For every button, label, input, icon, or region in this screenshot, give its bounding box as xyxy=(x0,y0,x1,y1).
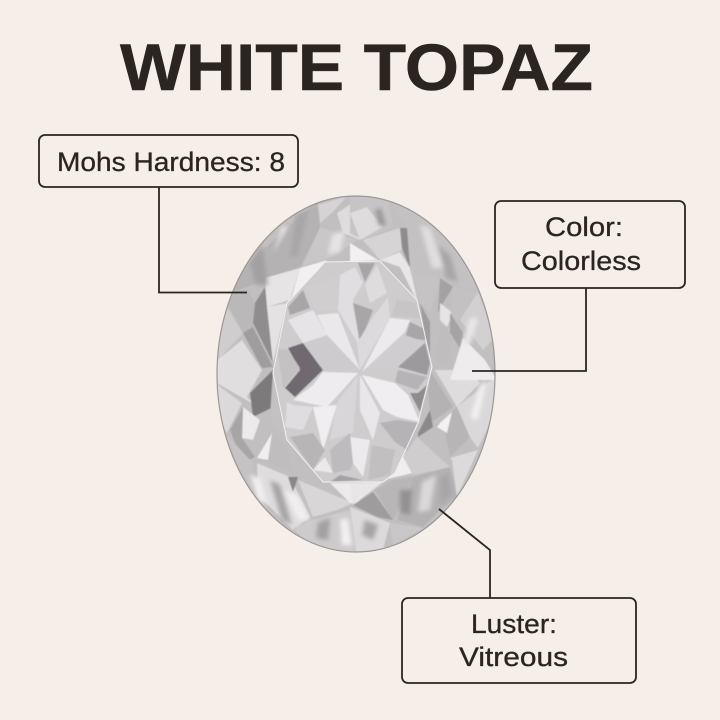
callout: luster xyxy=(402,598,636,683)
callout: color: Color: xyxy=(545,212,623,242)
gemstone illustration xyxy=(215,196,497,555)
leader line: Mohs hardness xyxy=(159,187,247,292)
callout: Mohs hardness xyxy=(39,135,298,187)
leader line: luster xyxy=(439,509,490,598)
callout: color xyxy=(495,201,685,288)
right crown xyxy=(446,408,469,456)
callout: color: Colorless xyxy=(521,246,641,276)
table of the gem xyxy=(273,261,432,482)
title: WHITE TOPAZ xyxy=(120,30,593,104)
top-left crown xyxy=(234,204,320,290)
callout: luster: Vitreous xyxy=(459,642,568,672)
callout: luster: Luster: xyxy=(471,609,557,639)
top crown xyxy=(350,198,360,238)
callout: Mohs hardness: Mohs Hardness: 8 xyxy=(57,147,285,177)
lower crown xyxy=(257,463,310,530)
left crown xyxy=(228,290,255,333)
soft reflections in the crown xyxy=(250,208,487,545)
leader line: color xyxy=(472,288,586,371)
